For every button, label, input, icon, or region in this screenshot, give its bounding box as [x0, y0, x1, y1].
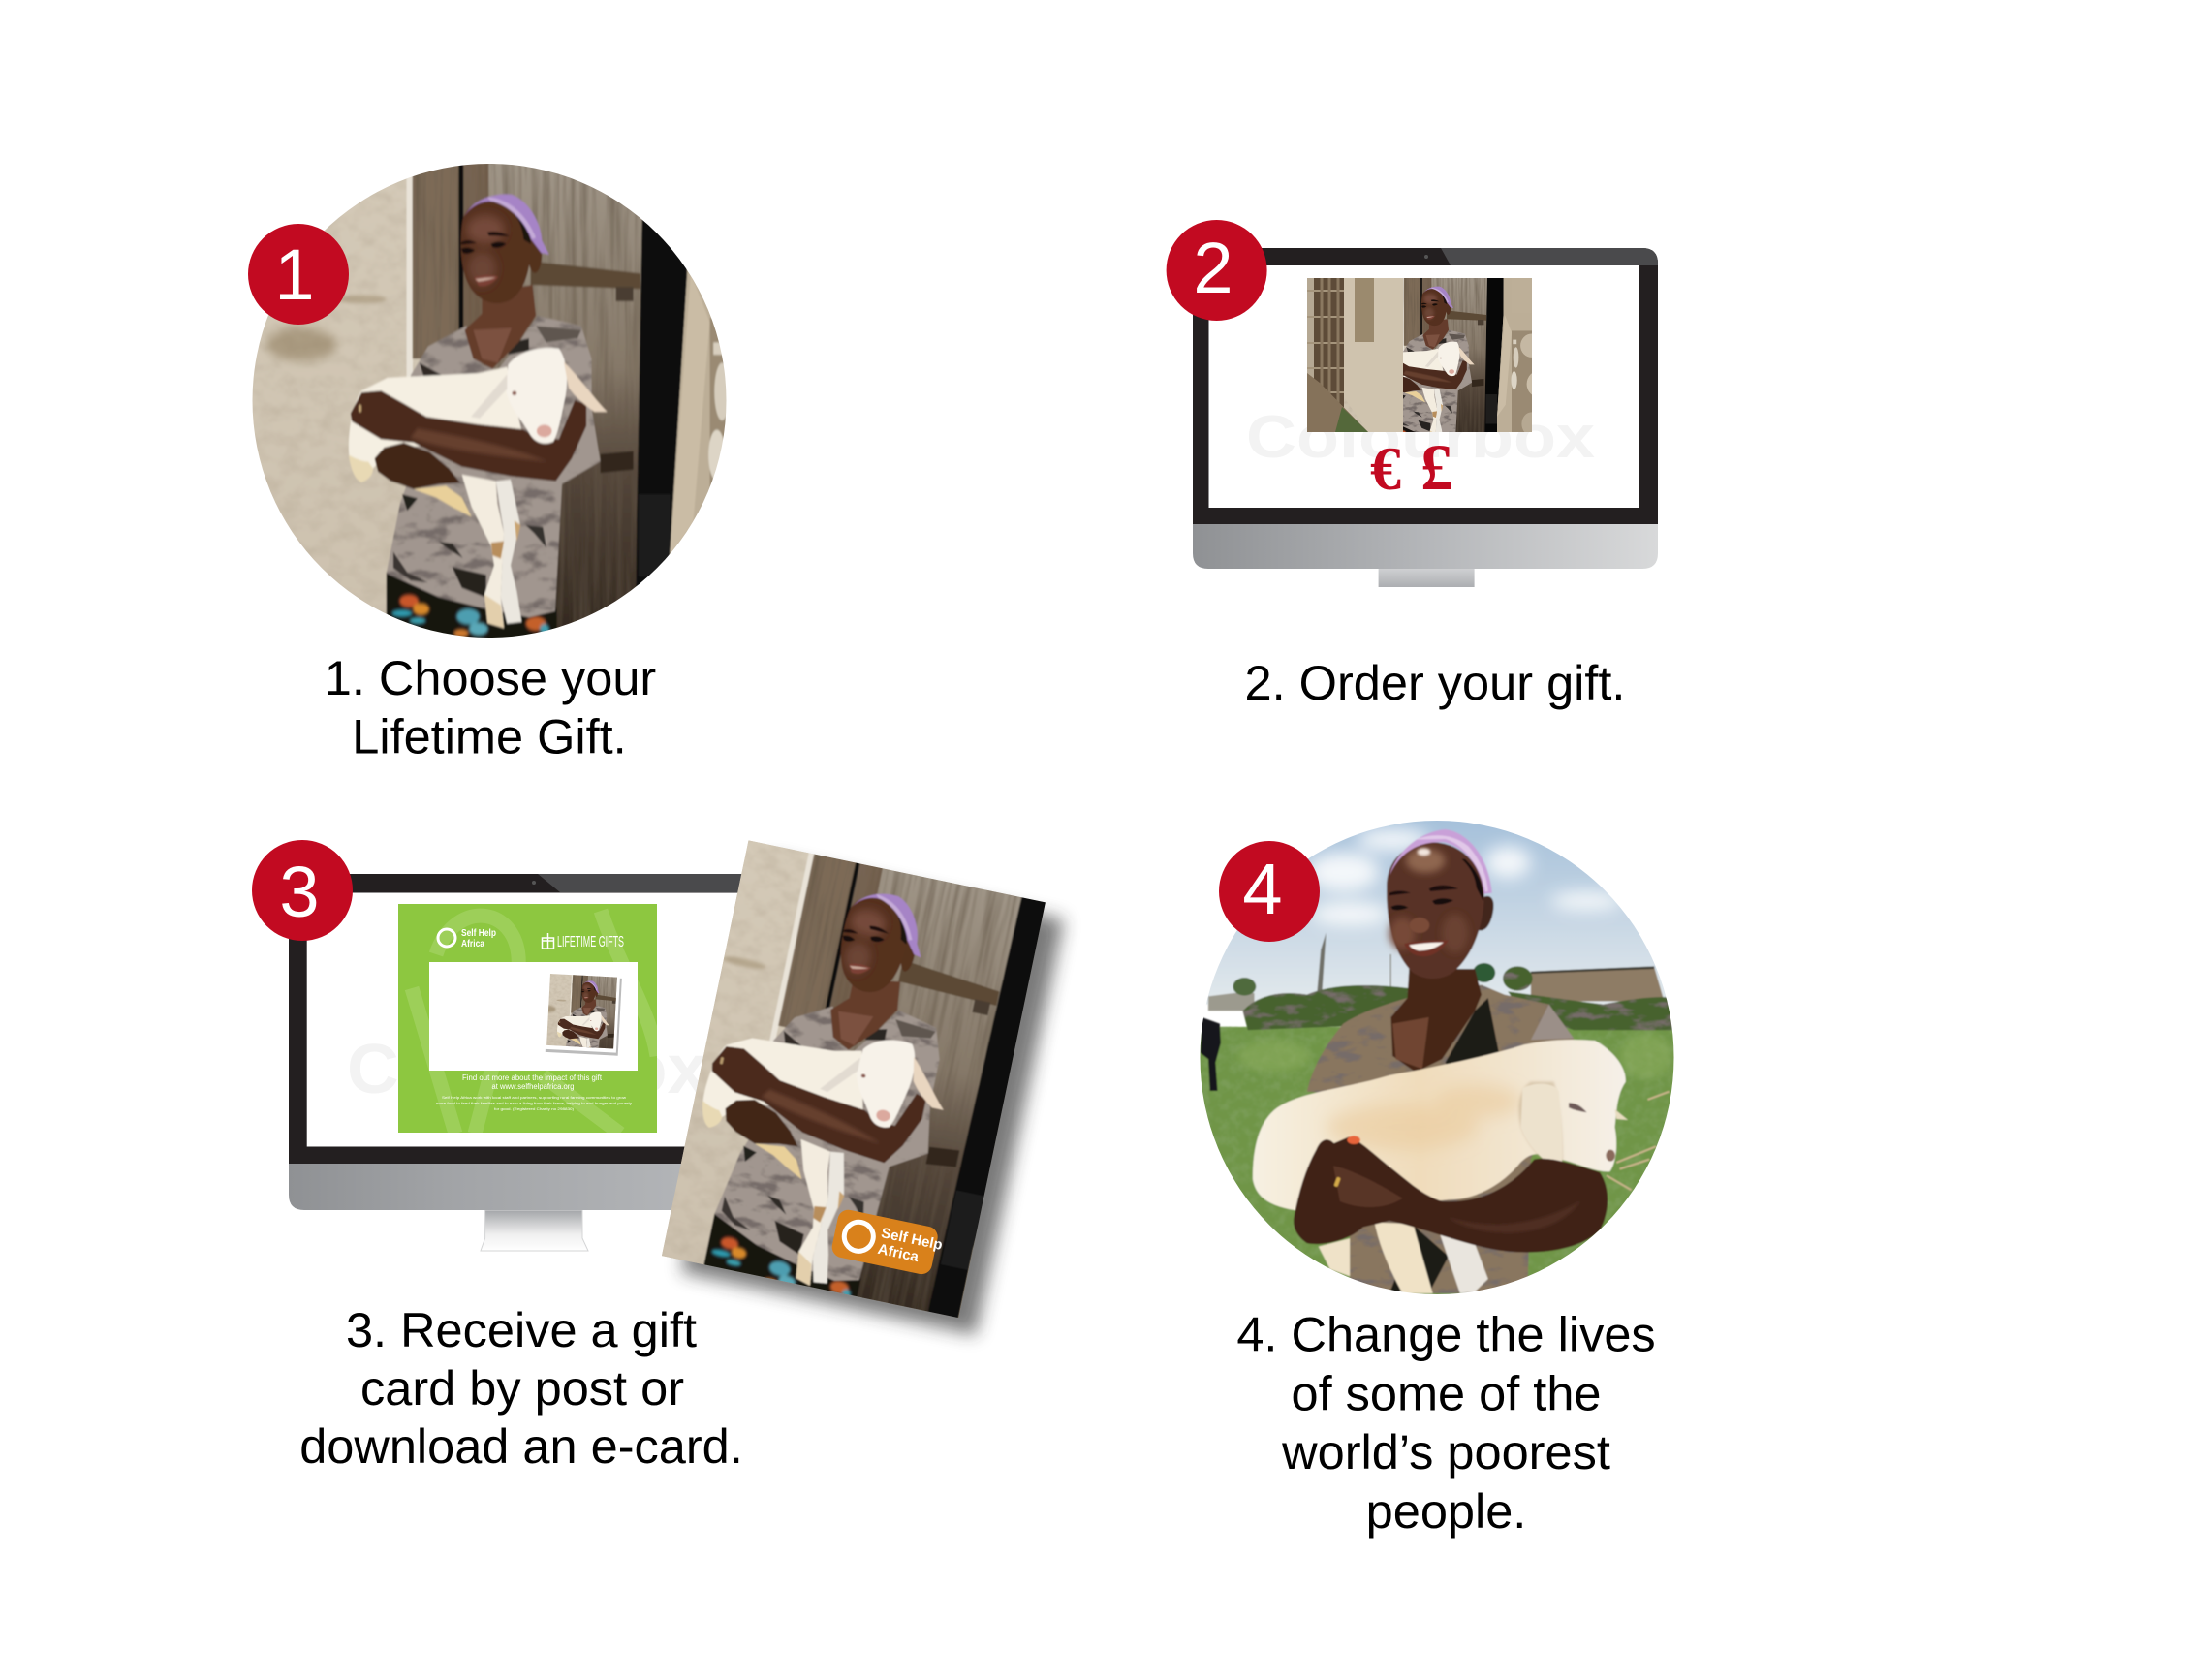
badge: number 4: 4: [1242, 849, 1283, 929]
badge: number 1: [248, 224, 349, 325]
gift card shadow: [681, 857, 1064, 1335]
headband: [1389, 829, 1492, 894]
watermark text: Colourbox: [1246, 404, 1596, 471]
photo on monitor: [1307, 278, 1532, 432]
caption: step 4: 4. Change the lives: [1236, 1306, 1656, 1362]
logo on e-card: Africa: [461, 939, 484, 949]
logo on e-card: Self Help: [461, 928, 496, 939]
shirt: [1307, 985, 1574, 1293]
Self Help Africa logo: [830, 1208, 946, 1277]
photo: smiling woman with goat in field: [1200, 821, 1674, 1294]
monitor: [289, 874, 765, 1251]
badge: number 2: 2: [1193, 228, 1233, 308]
goat legs: [1319, 1238, 1350, 1276]
photo: woman with goat in circle: [252, 164, 727, 638]
e-card text: Find out more about the impact of this gift: [462, 1073, 603, 1082]
e-card text: more food to feed their families and to earn a living from their farms, helping to end hunger and poverty: [436, 1101, 632, 1105]
caption: step 1: 1. Choose your: [325, 650, 656, 705]
gift card: [662, 840, 1046, 1318]
e-card on screen: [398, 904, 669, 1134]
badge: number 2: [1167, 220, 1267, 321]
badge: number 3: 3: [279, 852, 320, 932]
lifetime gifts heading: LIFETIME GIFTS: [557, 934, 624, 950]
panel: step 4: [1192, 804, 1705, 1539]
arms and hands: [1294, 1136, 1608, 1253]
caption: step 3: card by post or: [360, 1360, 684, 1416]
panel: step 1: [248, 164, 727, 754]
caption: step 3: 3. Receive a gift: [346, 1302, 697, 1357]
caption: step 1: Lifetime Gift.: [352, 709, 627, 763]
caption: step 3: download an e-card.: [299, 1418, 743, 1474]
lifetime gifts heading: [542, 933, 624, 950]
caption: step 4: world’s poorest: [1281, 1424, 1610, 1479]
face: [1476, 896, 1494, 930]
currency symbols: €: [1370, 434, 1401, 503]
thumbnail photo: [545, 974, 622, 1056]
logo on e-card: [438, 928, 496, 949]
currency symbols: £: [1420, 430, 1453, 504]
Self Help Africa logo: Self Help: [880, 1225, 944, 1254]
e-card text: for good. (Registered Charity no 298830): [494, 1106, 575, 1111]
monitor: Colourbox: [347, 1031, 707, 1108]
goat: [1253, 1040, 1626, 1211]
Self Help Africa logo: Africa: [876, 1241, 921, 1265]
caption: step 4: of some of the: [1291, 1366, 1602, 1420]
currency symbols: [1370, 430, 1453, 504]
e-card text: at www.selfhelpafrica.org: [492, 1082, 574, 1091]
panel: step 3: [252, 840, 1075, 1463]
neck and chest: [1391, 969, 1482, 1073]
e-card text: Self Help Africa work with local staff and partners, supporting rural farming communities to grow: [442, 1095, 626, 1100]
caption: step 4: people.: [1366, 1483, 1526, 1539]
e-card text: [436, 1073, 632, 1111]
cow: [1200, 1017, 1221, 1091]
panel: step 2: [1146, 220, 1658, 710]
badge: number 3: [252, 840, 353, 941]
caption: step 2: 2. Order your gift.: [1245, 655, 1625, 710]
badge: number 1: 1: [274, 234, 315, 315]
badge: number 4: [1219, 841, 1320, 942]
monitor: [1193, 248, 1658, 587]
